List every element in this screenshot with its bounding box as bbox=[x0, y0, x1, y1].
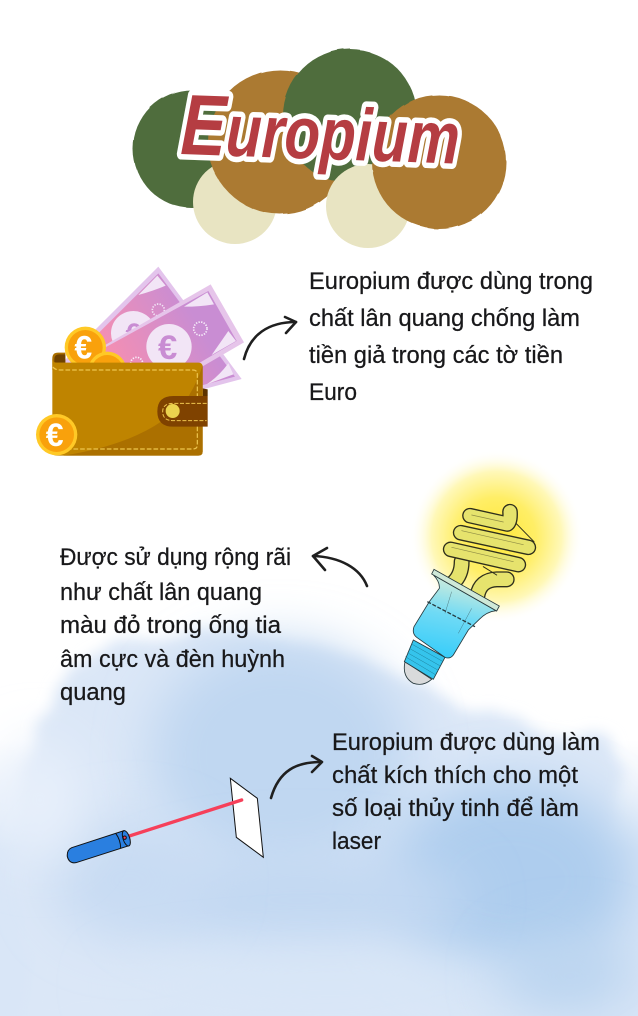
text block: anti-counterfeit phosphor bbox=[309, 268, 593, 406]
title text: Europium bbox=[179, 77, 462, 183]
wallet clasp bbox=[157, 396, 208, 427]
text block: anti-counterfeit phosphor: Euro bbox=[309, 379, 357, 406]
text block: red phosphor: quang bbox=[60, 679, 126, 706]
arrow: glass to text bbox=[271, 756, 322, 798]
banknote back bbox=[63, 267, 242, 412]
watercolor background bbox=[0, 633, 638, 1016]
banknote front: € bbox=[158, 329, 177, 367]
green circle top bbox=[283, 49, 417, 183]
banknote front bbox=[62, 284, 244, 395]
text block: laser glass: laser bbox=[332, 828, 381, 855]
bulb base bbox=[404, 569, 499, 684]
text block: laser glass: Europium được dùng làm bbox=[332, 729, 600, 756]
text block: red phosphor: Được sử dụng rộng rãi bbox=[60, 544, 291, 571]
illustration: wallet with euro notes and coins bbox=[36, 267, 244, 456]
illustration: laser pointer and glass bbox=[67, 778, 263, 863]
text block: red phosphor: màu đỏ trong ống tia bbox=[60, 612, 282, 639]
arrow: wallet to text bbox=[244, 317, 296, 359]
green circle left bbox=[133, 90, 251, 208]
brown circle centre bbox=[208, 70, 352, 214]
text block: anti-counterfeit phosphor: tiền giả trong các tờ tiền bbox=[309, 342, 563, 369]
brown circle right bbox=[372, 95, 506, 229]
coin front bbox=[36, 414, 77, 455]
coin: € bbox=[74, 330, 92, 366]
text block: red phosphor: như chất lân quang bbox=[60, 579, 262, 606]
text block: anti-counterfeit phosphor: chất lân quang chống làm bbox=[309, 305, 580, 332]
coin front: € bbox=[46, 417, 64, 453]
coin bbox=[65, 327, 106, 368]
text block: laser glass bbox=[332, 729, 600, 855]
title: Europium over paint circles bbox=[133, 49, 506, 248]
banknote back: € bbox=[126, 317, 142, 348]
bulb glow bbox=[410, 450, 583, 623]
wallet body bbox=[52, 353, 208, 456]
text block: red phosphor bbox=[60, 544, 291, 706]
illustration: fluorescent bulb bbox=[404, 450, 583, 684]
text block: red phosphor: âm cực và đèn huỳnh bbox=[60, 646, 285, 673]
laser pointer bbox=[67, 830, 132, 863]
arrow: bulb to text bbox=[313, 548, 367, 586]
text block: laser glass: số loại thủy tinh để làm bbox=[332, 795, 579, 822]
glass pane bbox=[230, 778, 263, 857]
laser beam bbox=[125, 800, 242, 837]
cream circle right bbox=[326, 164, 410, 248]
text block: laser glass: chất kích thích cho một bbox=[332, 762, 578, 789]
cream circle left bbox=[193, 160, 277, 244]
coin bbox=[88, 352, 127, 390]
bulb coil bbox=[451, 512, 534, 596]
text block: anti-counterfeit phosphor: Europium được dùng trong bbox=[309, 268, 593, 295]
